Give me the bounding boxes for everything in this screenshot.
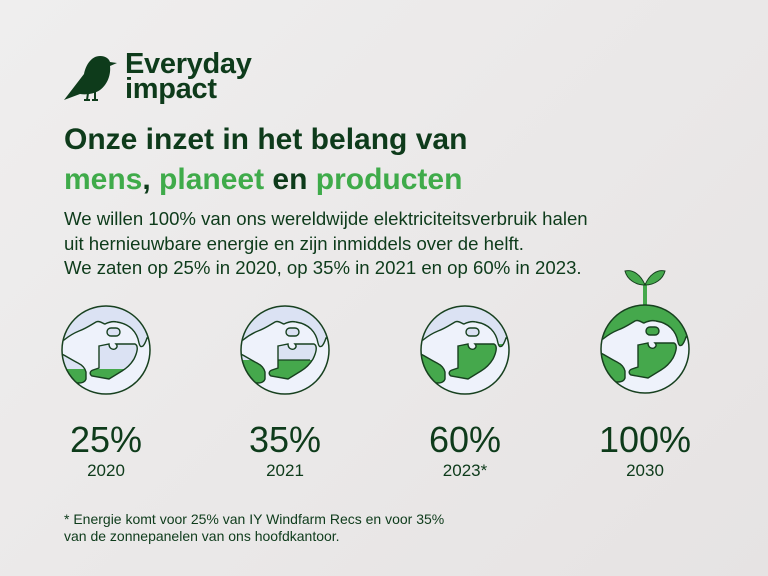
stat: 100% 2030 bbox=[599, 419, 691, 480]
globe: 2020 bbox=[60, 300, 152, 394]
logo bbox=[64, 48, 252, 105]
logo text: Everyday bbox=[125, 48, 252, 80]
stat: 60% 2023: 60% bbox=[429, 419, 501, 460]
description bbox=[64, 208, 588, 278]
title: mens, planeet en producten bbox=[64, 163, 462, 196]
stat: 35% 2021: 35% bbox=[249, 419, 321, 460]
stat: 35% 2021 bbox=[249, 419, 321, 480]
stat: 25% 2020: 25% bbox=[70, 419, 142, 460]
stat: 25% 2020: 2020 bbox=[87, 461, 125, 480]
stat: 100% 2030: 100% bbox=[599, 419, 691, 460]
globe: 2023 bbox=[419, 300, 511, 394]
icon: bird bbox=[64, 56, 117, 101]
logo text bbox=[125, 48, 252, 105]
description: uit hernieuwbare energie en zijn inmiddels over de helft. bbox=[64, 232, 524, 254]
footnote: van de zonnepanelen van ons hoofdkantoor. bbox=[64, 528, 340, 544]
stat: 25% 2020 bbox=[70, 419, 142, 480]
globe: 2030 with sprout bbox=[599, 271, 691, 393]
footnote: * Energie komt voor 25% van IY Windfarm Recs en voor 35% bbox=[64, 511, 444, 527]
globe: 2021 bbox=[239, 300, 331, 394]
stat: 100% 2030: 2030 bbox=[626, 461, 664, 480]
stat: 35% 2021: 2021 bbox=[266, 461, 304, 480]
title: Onze inzet in het belang van bbox=[64, 123, 467, 156]
description: We willen 100% van ons wereldwijde elektriciteitsverbruik halen bbox=[64, 208, 588, 229]
description: We zaten op 25% in 2020, op 35% in 2021 en op 60% in 2023. bbox=[64, 257, 582, 278]
logo text: impact bbox=[125, 73, 217, 105]
footnote bbox=[64, 511, 444, 544]
stat: 60% 2023: 2023* bbox=[443, 461, 487, 480]
globes chart bbox=[61, 270, 690, 395]
stat: 60% 2023 bbox=[429, 419, 501, 480]
title bbox=[64, 123, 467, 196]
